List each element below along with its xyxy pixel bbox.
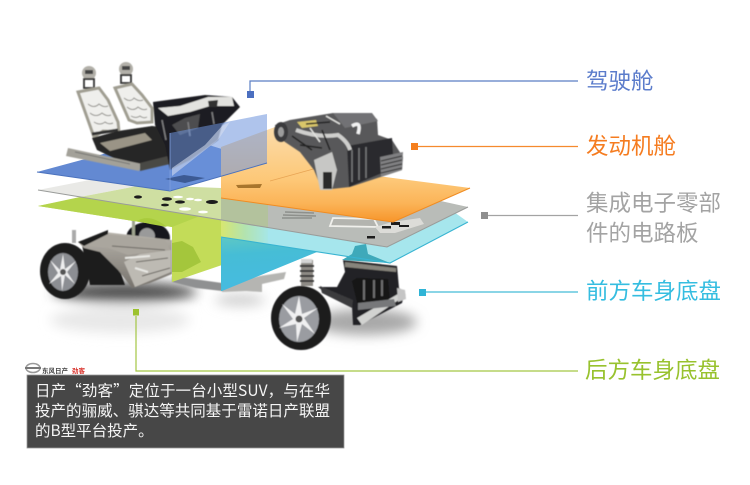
leader: engine bay — [411, 143, 578, 150]
circuit dots — [134, 195, 218, 213]
label: rear chassis: 后方车身底盘 — [585, 358, 720, 383]
green wheel arch — [137, 218, 167, 227]
seat base and rails — [66, 126, 172, 171]
engine — [274, 113, 403, 190]
rear chassis floor — [78, 232, 172, 288]
label: circuit board: 集成电子零部 — [586, 191, 721, 216]
front spring — [300, 259, 314, 286]
green horizontal and vertical layer — [38, 185, 268, 282]
caption box: 日产“劲客”定位于一台小型SUV，与在华 — [35, 379, 330, 401]
cyan vertical layer — [221, 237, 317, 291]
orange plane: engine bay — [221, 127, 470, 222]
front chassis — [271, 259, 406, 350]
leader: cockpit — [247, 81, 578, 98]
green tinted bumper — [172, 241, 201, 272]
logo — [25, 364, 86, 375]
cyan plane: front chassis — [221, 195, 468, 291]
caption box: 的B型平台投产。 — [35, 419, 154, 441]
front wheel — [271, 286, 331, 350]
leader: rear chassis — [133, 309, 578, 371]
rear axle arm — [172, 276, 222, 291]
right seat — [115, 62, 152, 123]
logo: 东风日产 — [42, 366, 68, 375]
label: front chassis: 前方车身底盘 — [586, 279, 721, 304]
spring through cyan — [342, 244, 390, 263]
rear far wheel — [126, 222, 170, 254]
left seat — [78, 66, 119, 137]
cyan horizontal layer — [221, 195, 468, 263]
label: cockpit: 驾驶舱 — [586, 69, 654, 94]
green plane: rear chassis — [38, 185, 268, 282]
label: circuit board: 件的电路板 — [586, 221, 699, 246]
front subframe — [318, 260, 405, 325]
leader: circuit board — [481, 212, 578, 219]
leader: front chassis — [419, 289, 578, 296]
caption box — [27, 375, 344, 448]
orange plate mark — [236, 184, 262, 188]
blue plane vertical: cockpit — [37, 114, 267, 191]
rear chassis underside — [82, 245, 125, 285]
caption box: 投产的骊威、骐达等共同基于雷诺日产联盟 — [35, 399, 330, 421]
rear chassis — [40, 214, 286, 299]
green-cyan blend — [221, 218, 268, 244]
blue plane horizontal: cockpit — [37, 133, 267, 191]
grey plane: circuit board — [38, 170, 468, 247]
rear left wheel — [40, 243, 90, 299]
seats and dashboard — [66, 62, 240, 171]
chassis floor shadow — [50, 282, 417, 335]
logo: 劲客 — [72, 366, 86, 375]
dashboard — [153, 95, 240, 170]
label: engine bay: 发动机舱 — [586, 134, 676, 159]
